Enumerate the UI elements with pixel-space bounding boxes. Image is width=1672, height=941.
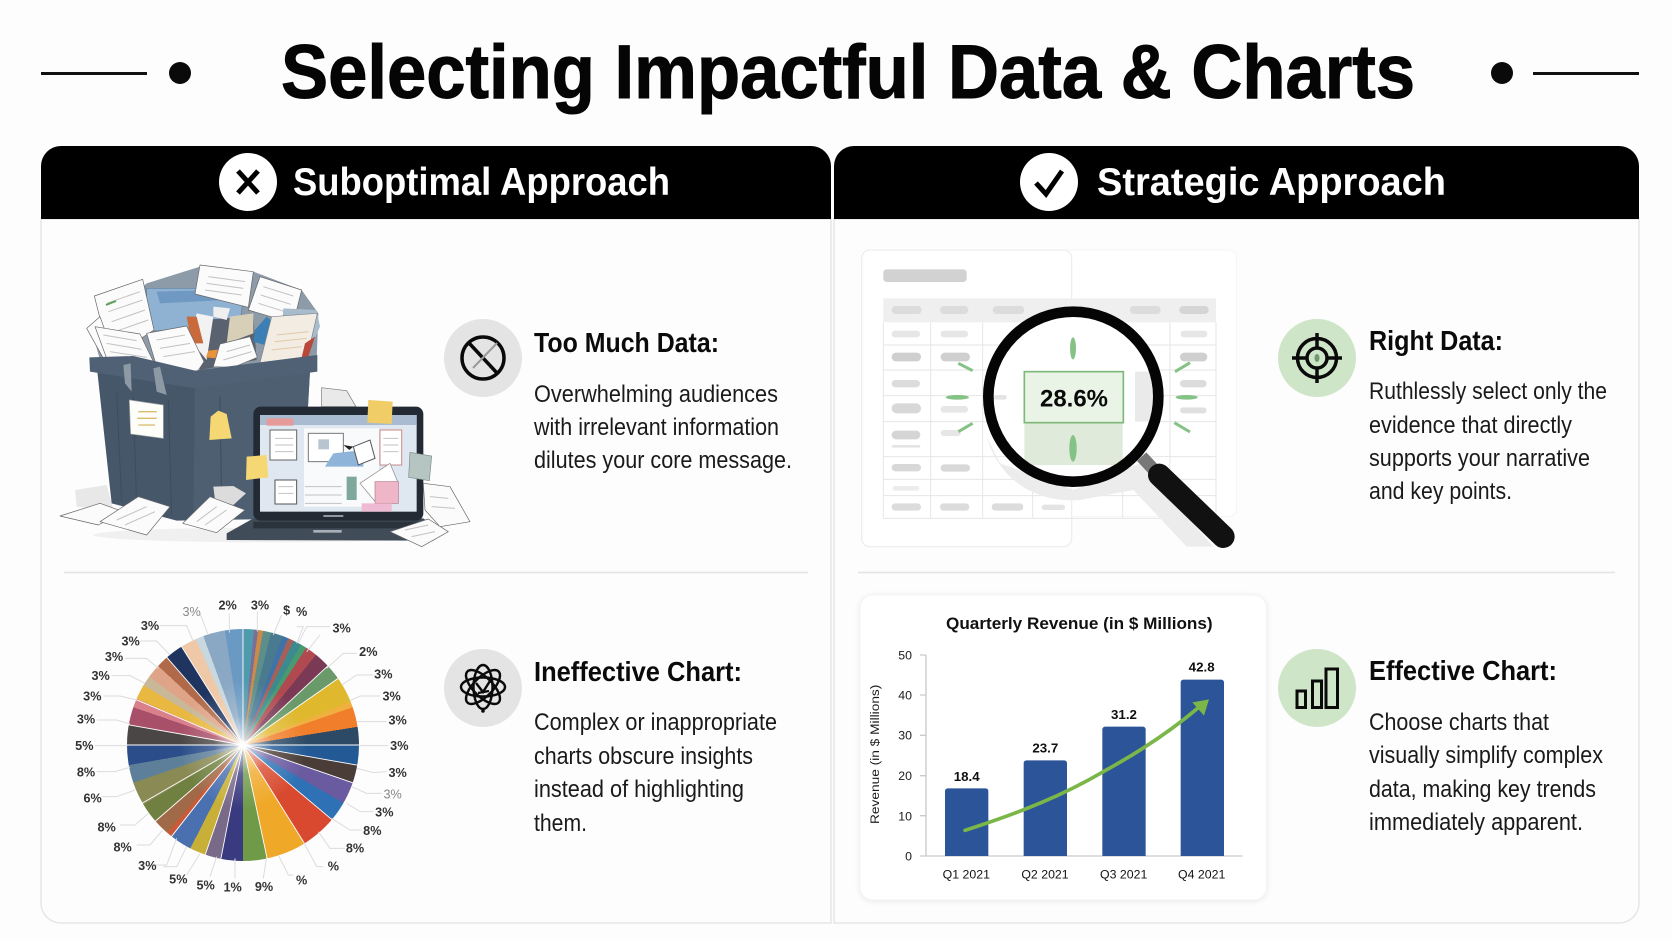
body: right data: supports your narrative — [1369, 445, 1590, 472]
pie chart labels: 3% — [83, 689, 101, 703]
decorative title rule: left — [41, 62, 191, 84]
pie chart labels: 8% — [363, 824, 381, 838]
body: right data: and key points. — [1369, 478, 1512, 505]
bar values: 18.4 — [954, 769, 980, 784]
pie chart labels: 8% — [346, 842, 364, 856]
lens shadow — [987, 437, 1213, 547]
x axis labels — [943, 867, 1225, 881]
body: ineffective chart: Complex or inappropriate — [534, 709, 777, 736]
text block: too much data — [444, 319, 792, 474]
x axis labels: Q1 2021 — [943, 867, 990, 881]
pie chart labels: 8% — [77, 766, 95, 780]
pie chart labels: 3% — [384, 788, 402, 802]
text block: right data — [1278, 319, 1607, 505]
heading: ineffective chart: Ineffective Chart: — [534, 656, 742, 687]
y axis labels: 10 — [898, 809, 912, 823]
y axis labels: 30 — [898, 729, 912, 743]
bars — [945, 680, 1224, 856]
y axis labels: 40 — [898, 688, 912, 702]
y axis title: Revenue (in $ Millions) — [868, 685, 882, 824]
pie chart labels: 5% — [169, 872, 187, 886]
text block: effective chart — [1278, 649, 1603, 836]
y axis labels: 20 — [898, 769, 912, 783]
bin contents — [87, 265, 320, 377]
icon: target — [1278, 319, 1356, 397]
pie chart labels: % — [328, 859, 339, 873]
laptop — [227, 388, 443, 541]
pie chart labels: 3% — [251, 598, 269, 612]
title: Selecting Impactful Data & Charts — [281, 30, 1415, 115]
bar values: 23.7 — [1032, 741, 1058, 756]
pie chart labels: 3% — [105, 650, 123, 664]
pie chart labels: 3% — [138, 859, 156, 873]
pie chart labels — [75, 598, 408, 895]
heading: right data: Right Data: — [1369, 325, 1503, 356]
pie chart labels: 5% — [197, 878, 215, 892]
spreadsheet card — [862, 250, 1237, 547]
pie chart labels: % — [296, 605, 307, 619]
x axis labels: Q4 2021 — [1178, 867, 1225, 881]
illustration: spreadsheet under magnifying glass — [862, 250, 1237, 547]
body: effective chart — [1369, 709, 1603, 836]
header bar: strategic — [834, 146, 1639, 219]
magnifier handle — [1142, 457, 1223, 537]
body: ineffective chart: them. — [534, 810, 587, 837]
highlighted value — [1024, 372, 1123, 423]
body: effective chart: visually simplify complex — [1369, 742, 1603, 769]
body: too much data: with irrelevant information — [533, 414, 779, 441]
white slices and centre of pie chart — [126, 628, 360, 860]
pie chart labels: 3% — [183, 605, 201, 619]
bar values — [954, 660, 1215, 784]
pie chart labels: 8% — [114, 841, 132, 855]
pie chart labels: 8% — [98, 821, 116, 835]
trend arrow — [965, 699, 1209, 830]
magnifier lens — [988, 312, 1158, 482]
chart title: Quarterly Revenue (in $ Millions) — [946, 614, 1213, 633]
highlighted value: 28.6% — [1040, 386, 1108, 413]
pie chart labels: 3% — [390, 739, 408, 753]
icon: check mark — [1020, 153, 1078, 211]
body: too much data: dilutes your core message. — [534, 447, 792, 474]
icon: bar chart — [1278, 649, 1356, 727]
bar values: 42.8 — [1189, 660, 1215, 675]
pie chart labels: 2% — [219, 598, 237, 612]
y axis labels: 0 — [905, 849, 912, 863]
pie chart labels: 3% — [141, 619, 159, 633]
pie chart labels: 1% — [224, 881, 242, 895]
body: too much data: Overwhelming audiences — [534, 381, 778, 408]
body: effective chart: Choose charts that — [1369, 709, 1549, 736]
pie chart labels: 9% — [255, 880, 273, 894]
axes — [920, 655, 1243, 856]
pie chart labels: 3% — [383, 689, 401, 703]
pie chart labels: 3% — [375, 806, 393, 820]
body: right data: Ruthlessly select only the — [1369, 378, 1607, 405]
heading: effective chart: Effective Chart: — [1369, 655, 1557, 686]
chart: quarterly revenue bar chart — [860, 595, 1267, 900]
pie chart labels: 3% — [389, 766, 407, 780]
heading: strategic approach: Strategic Approach — [1097, 161, 1446, 204]
header bar: suboptimal — [41, 146, 831, 219]
pie chart labels: $ — [283, 603, 290, 617]
y axis labels: 50 — [898, 648, 912, 662]
decorative title rule: right — [1491, 62, 1639, 84]
heading: too much data: Too Much Data: — [534, 327, 719, 358]
body: effective chart: data, making key trends — [1369, 776, 1596, 803]
pie chart segments — [127, 629, 359, 861]
y axis labels — [898, 648, 912, 863]
pie chart labels: 2% — [359, 645, 377, 659]
icon: tangled rosette — [444, 649, 522, 727]
body: too much data — [533, 381, 792, 474]
pie chart labels: 3% — [374, 667, 392, 681]
pie chart labels: 3% — [122, 634, 140, 648]
pie chart labels: 3% — [389, 713, 407, 727]
scattered papers — [60, 483, 470, 547]
pie chart labels: 6% — [84, 792, 102, 806]
green highlight rays — [946, 337, 1198, 462]
panel: suboptimal approach — [41, 146, 831, 923]
body: effective chart: immediately apparent. — [1369, 809, 1583, 836]
panel: strategic approach — [834, 146, 1639, 923]
pie chart labels: 3% — [92, 669, 110, 683]
body: right data: evidence that directly — [1369, 412, 1572, 439]
x axis labels: Q2 2021 — [1021, 867, 1069, 881]
body: ineffective chart: charts obscure insights — [534, 743, 753, 770]
body: ineffective chart — [534, 709, 777, 837]
text block: ineffective chart — [444, 649, 777, 837]
body: ineffective chart: instead of highlighting — [534, 776, 744, 803]
pie chart labels: 3% — [333, 622, 351, 636]
illustration: overflowing bin and laptop — [60, 265, 470, 547]
heading: suboptimal approach: Suboptimal Approach — [293, 161, 670, 204]
x axis labels: Q3 2021 — [1100, 867, 1147, 881]
bar values: 31.2 — [1111, 707, 1137, 722]
icon: prohibited — [444, 319, 522, 397]
pie chart labels: 3% — [77, 713, 95, 727]
icon: x mark — [219, 153, 277, 211]
body: right data — [1369, 378, 1607, 505]
pie chart labels: % — [296, 873, 307, 887]
pie chart labels: 5% — [75, 739, 93, 753]
bin body — [89, 355, 317, 521]
